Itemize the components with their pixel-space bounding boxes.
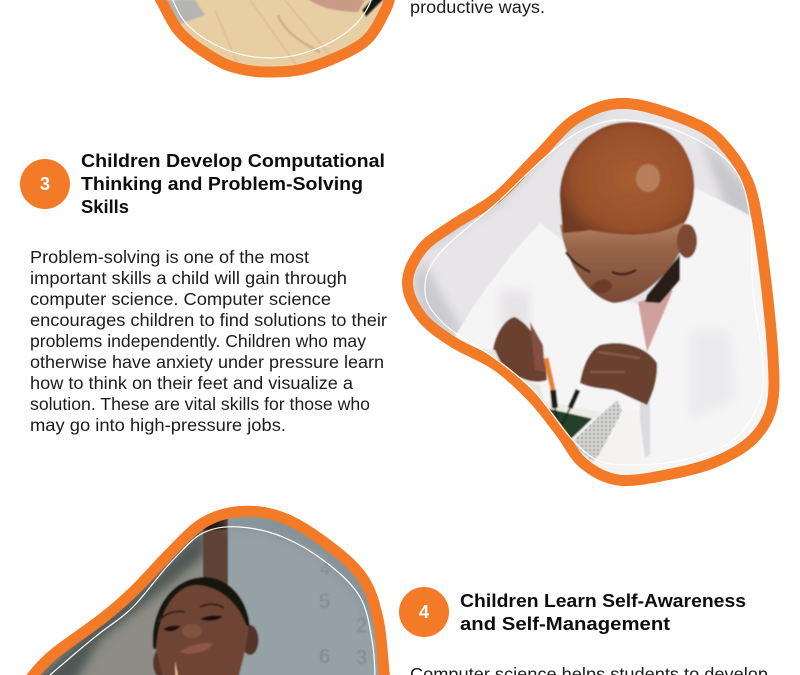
photo: boy with pencil in front of whiteboard: 2	[356, 615, 367, 637]
heading: section 3: Thinking and Problem-Solving	[81, 173, 363, 194]
text block: section 3 paragraph: solution. These are vital skills for those who	[30, 394, 370, 414]
heading: section 3: Children Develop Computational	[81, 150, 385, 171]
orange outline	[408, 103, 774, 481]
text block: section 3 paragraph: otherwise have anxiety under pressure learn	[30, 352, 384, 372]
heading: section 4: Children Learn Self-Awareness	[460, 590, 746, 611]
panel: section 3 image blob	[400, 95, 790, 490]
heading: section 3: Skills	[81, 196, 129, 217]
panel: section 4 image blob	[15, 505, 390, 675]
text block: section 3 paragraph	[30, 247, 387, 435]
photo: boy with pencil in front of whiteboard: 6	[319, 646, 330, 668]
heading: section 4: and Self-Management	[460, 613, 670, 634]
white inner line	[172, 0, 372, 58]
text block: section 3 paragraph: important skills a child will gain through	[30, 268, 347, 288]
photo: boy with pencil in front of whiteboard: 5	[319, 591, 330, 613]
white inner line	[40, 527, 375, 675]
text block: section 3 paragraph: may go into high-pressure jobs.	[30, 415, 286, 435]
number badge 4: 4	[419, 602, 429, 622]
text block: section 3 paragraph: how to think on their feet and visualize a	[30, 373, 353, 393]
heading: section 3	[81, 150, 385, 217]
text block: section 3 paragraph: problems independently. Children who may	[30, 331, 366, 351]
text block: section 3 paragraph: Problem-solving is one of the most	[30, 247, 309, 267]
photo: boy with pencil in front of whiteboard: 3	[356, 647, 367, 669]
number badge 3: 3	[40, 174, 50, 194]
number badge 4	[399, 587, 449, 637]
panel: section 2 image blob	[154, 0, 395, 78]
white inner line	[425, 120, 763, 465]
orange outline	[15, 511, 387, 675]
orange outline	[158, 0, 390, 72]
photo: boy with pencil in front of whiteboard	[40, 516, 379, 675]
number badge 3	[20, 159, 70, 209]
text block: section 3 paragraph: encourages children to find solutions to their	[30, 310, 387, 330]
photo: laptop on wooden desk	[167, 0, 384, 66]
photo: boy with pencil in front of whiteboard: 4	[320, 559, 330, 579]
photo: child in white coat repairing a computer	[413, 109, 768, 475]
text block: section 3 paragraph: computer science. Computer science	[30, 289, 331, 309]
heading: section 4	[460, 590, 746, 634]
